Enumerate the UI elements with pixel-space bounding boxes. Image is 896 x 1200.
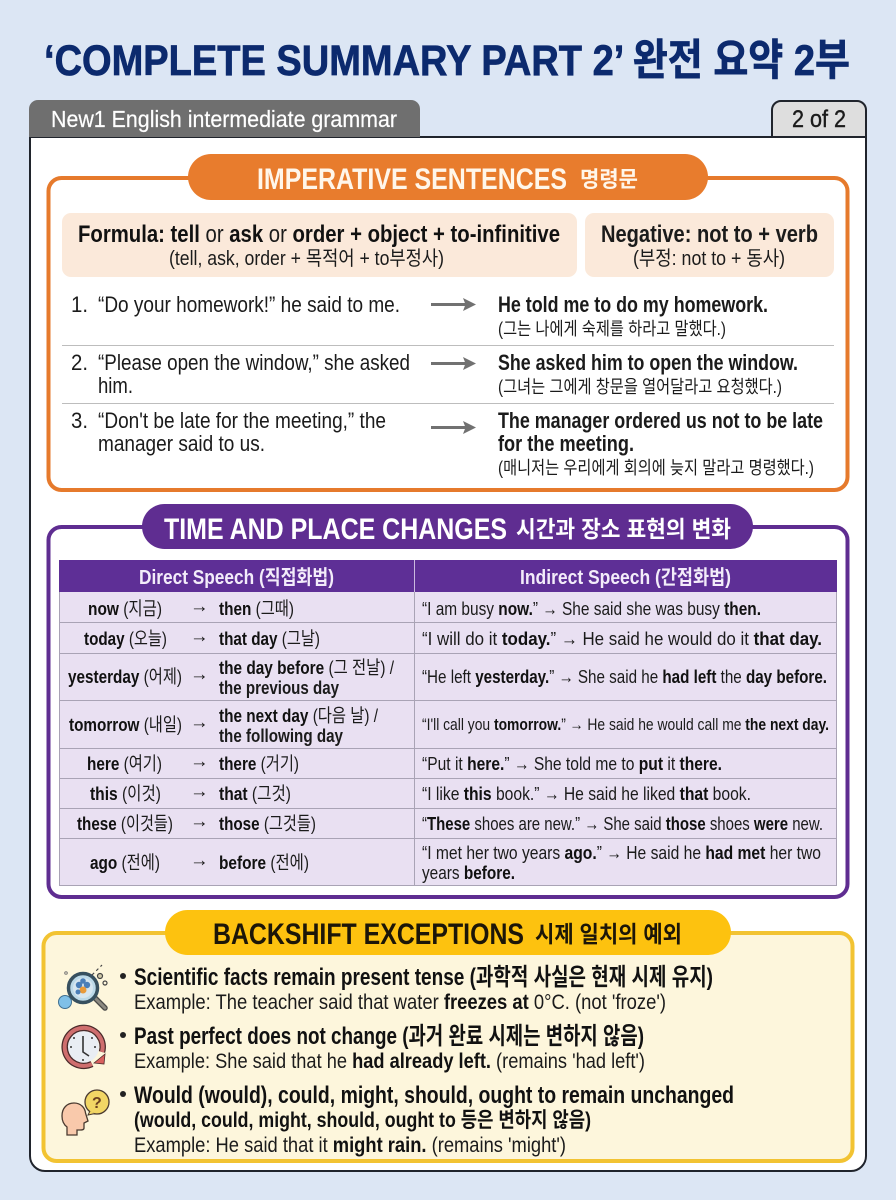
icon: magnifying glass	[58, 965, 107, 1008]
row: now: then (그때)	[219, 598, 294, 619]
example 3: manager said to us.	[98, 431, 265, 456]
example 2: him.	[98, 373, 133, 398]
tab: course name: New1 English intermediate grammar	[51, 106, 397, 132]
row: ago	[90, 842, 821, 883]
item: past perfect	[120, 1023, 645, 1073]
example 2: She asked him to open the window.	[498, 350, 798, 375]
row: here	[87, 750, 722, 774]
example 1: (그는 나에게 숙제를 하라고 말했다.)	[498, 319, 726, 339]
negative box	[585, 213, 834, 277]
panel: backshift exceptions	[44, 910, 852, 1161]
row: now	[88, 595, 761, 619]
heading: time and place changes: 시간과 장소 표현의 변화	[516, 516, 731, 542]
row: today: →	[190, 625, 208, 646]
row: yesterday: the previous day	[219, 677, 340, 698]
row: tomorrow: →	[190, 711, 208, 732]
example 2: “Please open the window,” she asked	[98, 350, 410, 375]
row: ago: →	[190, 849, 208, 870]
example 2: (그녀는 그에게 창문을 열어달라고 요청했다.)	[498, 377, 782, 397]
heading: imperative sentences: IMPERATIVE SENTENCES	[257, 163, 567, 196]
item: scientific facts: Example: The teacher said that water freezes at 0°C. (not 'froze')	[134, 991, 666, 1014]
tab: page number: 2 of 2	[792, 106, 846, 133]
row: today: today (오늘)	[84, 628, 167, 649]
example 2	[71, 350, 798, 398]
item: modals: Example: He said that it might rain. (remains 'might')	[134, 1134, 566, 1157]
row: tomorrow: the following day	[219, 725, 344, 746]
item: modals	[120, 1082, 734, 1157]
row: ago: years before.	[422, 862, 515, 883]
example 3: “Don't be late for the meeting,” the	[98, 408, 386, 433]
row: this: →	[190, 780, 208, 801]
row: this	[90, 780, 751, 804]
item: scientific facts	[120, 964, 713, 1014]
heading: backshift exceptions: BACKSHIFT EXCEPTIONS	[213, 918, 524, 951]
example 1	[71, 292, 768, 339]
row: yesterday	[68, 657, 827, 698]
row: these: those (그것들)	[219, 813, 316, 834]
row: this: “I like this book.” → He said he liked that book.	[422, 783, 751, 804]
row: tomorrow	[69, 705, 829, 746]
heading: backshift exceptions: 시제 일치의 예외	[535, 921, 682, 947]
example 3: (매니저는 우리에게 회의에 늦지 말라고 명령했다.)	[498, 458, 814, 478]
item: modals: (would, could, might, should, ought to 등은 변하지 않음)	[134, 1109, 591, 1132]
example 1: He told me to do my homework.	[498, 292, 768, 317]
row: here: “Put it here.” → She told me to put it there.	[422, 753, 722, 774]
example 3: for the meeting.	[498, 431, 634, 456]
item: modals: Would (would), could, might, should, ought to remain unchanged	[134, 1082, 734, 1109]
row: yesterday: yesterday (어제)	[68, 666, 182, 687]
icon: head with question	[62, 1090, 109, 1135]
item: past perfect: Past perfect does not change (과거 완료 시제는 변하지 않음)	[134, 1023, 644, 1050]
row: ago: before (전에)	[219, 852, 309, 873]
row: yesterday: →	[190, 663, 208, 684]
row: ago: “I met her two years ago.” → He said he had met her two	[422, 842, 821, 863]
heading: time and place changes	[142, 504, 753, 549]
panel: imperative sentences	[48, 154, 848, 490]
table header: Indirect Speech (간접화법)	[520, 566, 731, 589]
heading: imperative sentences: 명령문	[580, 167, 638, 192]
row: ago: ago (전에)	[90, 852, 160, 873]
arrow	[431, 421, 476, 434]
row: these: →	[190, 810, 208, 831]
row: now: now (지금)	[88, 598, 162, 619]
row: here: here (여기)	[87, 753, 162, 774]
row: yesterday: “He left yesterday.” → She said he had left the day before.	[422, 666, 827, 687]
row: today: that day (그날)	[219, 628, 320, 649]
row: now: “I am busy now.” → She said she was busy then.	[422, 598, 761, 619]
row: today	[84, 625, 822, 649]
row: yesterday: the day before (그 전날) /	[219, 657, 395, 678]
row: this: this (이것)	[90, 783, 161, 804]
arrow	[431, 298, 476, 311]
formula box: Formula: tell or ask or order + object + to-infinitive	[78, 221, 560, 248]
example 3: 3.	[71, 408, 88, 433]
formula box	[62, 213, 577, 277]
item: scientific facts: Scientific facts remain present tense (과학적 사실은 현재 시제 유지)	[134, 964, 713, 991]
example 1: “Do your homework!” he said to me.	[98, 292, 400, 317]
arrow	[431, 357, 476, 370]
example 3: The manager ordered us not to be late	[498, 408, 823, 433]
row: now: →	[190, 595, 208, 616]
tab: course name	[29, 100, 420, 137]
formula box: (tell, ask, order + 목적어 + to부정사)	[169, 247, 444, 270]
heading: backshift exceptions	[165, 910, 731, 955]
example 1: 1.	[71, 292, 88, 317]
row: here: there (거기)	[219, 753, 299, 774]
row: these: “These shoes are new.” → She said those shoes were new.	[422, 813, 823, 834]
row: tomorrow: the next day (다음 날) /	[219, 705, 379, 726]
row: tomorrow: “I'll call you tomorrow.” → He said he would call me the next day.	[422, 715, 829, 734]
example 3	[71, 408, 823, 478]
example 2: 2.	[71, 350, 88, 375]
negative box: (부정: not to + 동사)	[633, 247, 785, 270]
item: past perfect: Example: She said that he had already left. (remains 'had left')	[134, 1050, 645, 1073]
heading: time and place changes: TIME AND PLACE CHANGES	[164, 513, 507, 546]
icon: head with question: ?	[92, 1095, 102, 1112]
heading: imperative sentences	[188, 154, 708, 200]
row: today: “I will do it today.” → He said he would do it that day.	[422, 628, 822, 649]
row: tomorrow: tomorrow (내일)	[69, 714, 182, 735]
row: these: these (이것들)	[77, 813, 173, 834]
table	[59, 560, 837, 886]
icon: clock	[65, 1028, 105, 1066]
panel: time and place changes	[48, 504, 848, 897]
table header	[59, 560, 837, 592]
tab: page number	[772, 101, 866, 137]
row: these	[77, 810, 823, 834]
negative box: Negative: not to + verb	[601, 221, 818, 248]
table header: Direct Speech (직접화법)	[139, 566, 334, 589]
row: this: that (그것)	[219, 783, 291, 804]
row: here: →	[190, 750, 208, 771]
